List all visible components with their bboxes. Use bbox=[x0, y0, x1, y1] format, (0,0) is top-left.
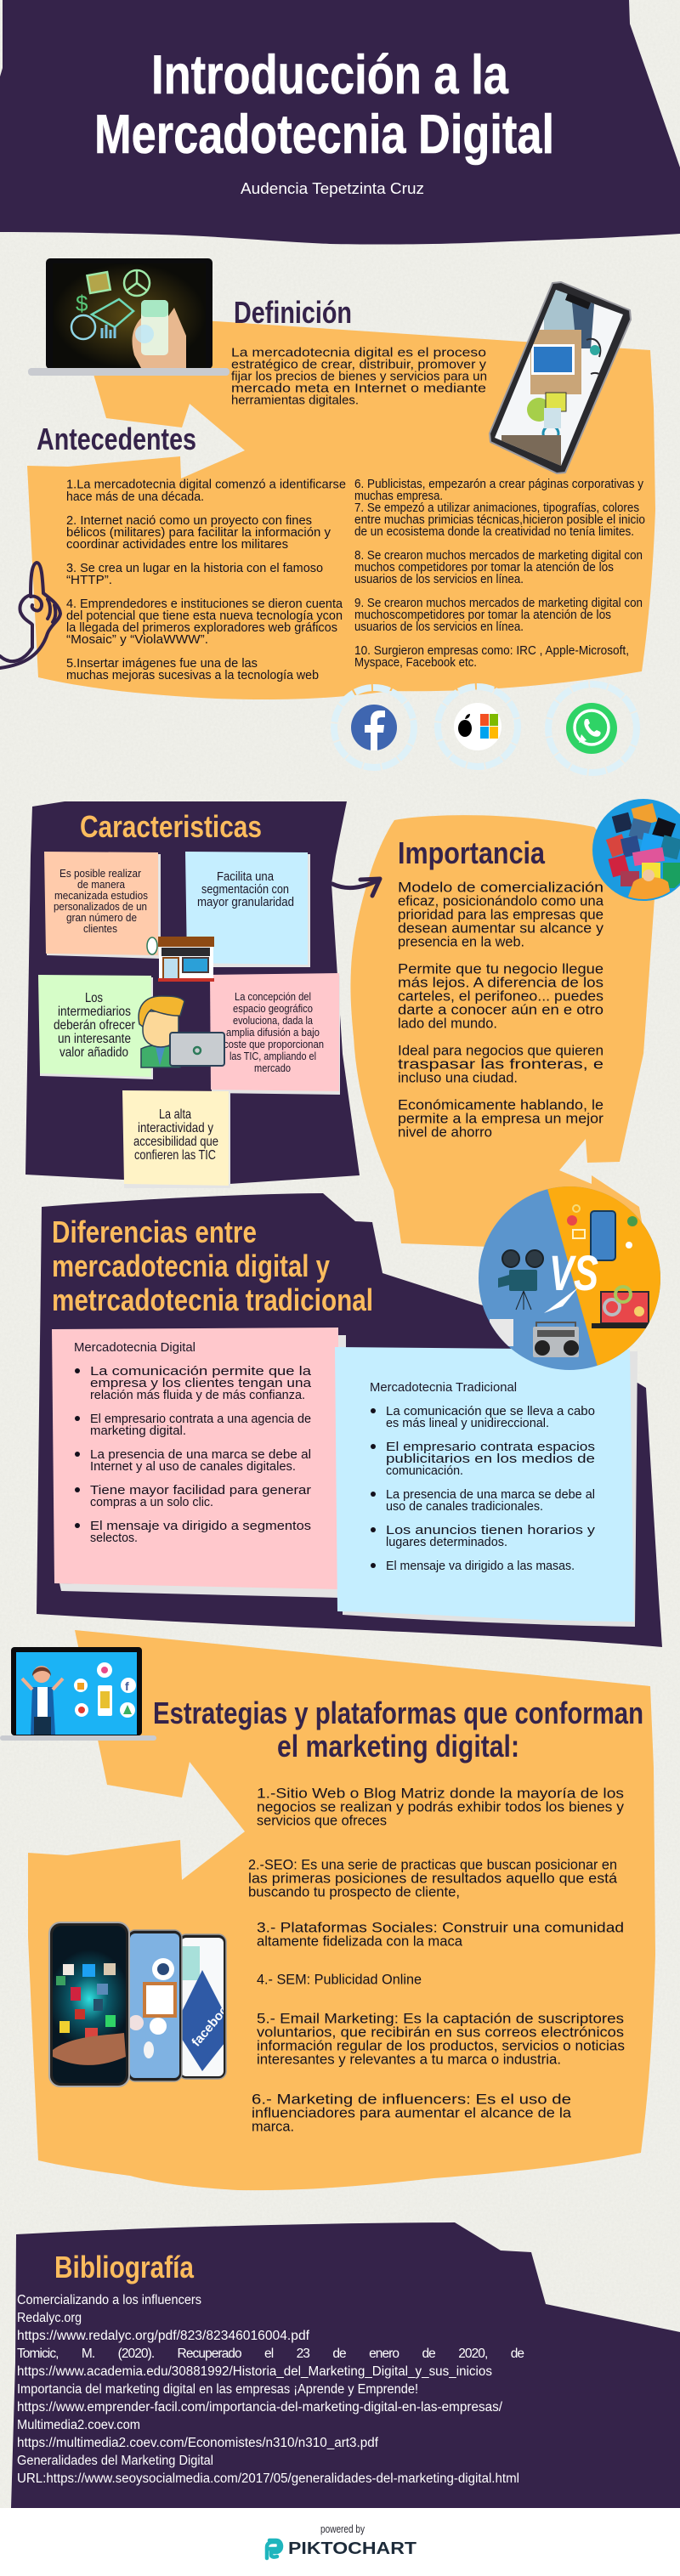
heading: diferencias: Diferencias entre bbox=[52, 1214, 257, 1249]
VS lettering: VS bbox=[549, 1246, 598, 1301]
panel: mercadotecnia tradicional blue note: La presencia de una marca se debe al bbox=[386, 1487, 595, 1502]
text: estrategias list: interesantes y relevantes a tu marca o industria. bbox=[257, 2052, 561, 2067]
text: antecedentes left column: “Mosaic” y “ViolaWWW”. bbox=[66, 632, 208, 647]
text: estrategias list: buscando tu prospecto de cliente, bbox=[248, 1883, 460, 1900]
text: importancia: más lejos. A diferencia de los bbox=[398, 974, 604, 991]
panel: mercadotecnia digital pink note: Tiene mayor facilidad para generar bbox=[90, 1483, 311, 1497]
note: peach: mecanizada estudios bbox=[54, 889, 148, 902]
text: estrategias list: marca. bbox=[252, 2118, 294, 2135]
text: estrategias list: 5.- Email Marketing: Es la captación de suscriptores bbox=[257, 2011, 624, 2026]
panel: diferencias dark bbox=[37, 1193, 662, 1647]
text: antecedentes left column: coordinar actividades entre los militares bbox=[66, 537, 288, 552]
panel: mercadotecnia digital pink note: marketing digital. bbox=[90, 1424, 186, 1438]
heading: Definición: Definición bbox=[234, 295, 352, 330]
text: antecedentes right column: usuarios de los servicios en línea. bbox=[354, 572, 524, 586]
panel: mercadotecnia tradicional blue note: La comunicación que se lleva a cabo bbox=[386, 1404, 595, 1418]
panel: mercadotecnia digital pink note: La presencia de una marca se debe al bbox=[90, 1447, 311, 1462]
references: Importancia del marketing digital en las empresas ¡Aprende y Emprende! bbox=[17, 2382, 418, 2397]
references: Redalyc.org bbox=[17, 2311, 82, 2325]
text: antecedentes left column: hace más de una década. bbox=[66, 490, 204, 504]
panel: mercadotecnia tradicional blue note: comunicación. bbox=[386, 1464, 463, 1478]
laptop base bbox=[0, 1735, 156, 1741]
header banner bbox=[0, 0, 680, 245]
icon: laptop with neon marketing icons bbox=[28, 258, 230, 376]
text: antecedentes right column: usuarios de los servicios en línea. bbox=[354, 620, 524, 634]
panel: mercadotecnia tradicional blue note bbox=[335, 1347, 638, 1627]
note: blue bbox=[185, 852, 310, 967]
references: Generalidades del Marketing Digital bbox=[17, 2454, 213, 2468]
note: green: valor añadido bbox=[60, 1045, 128, 1060]
text: antecedentes right column: muchoscompetidores por tomar la atención de los bbox=[354, 608, 611, 622]
note: blue: mayor granularidad bbox=[197, 895, 294, 909]
panel: mercadotecnia digital pink note: Mercadotecnia Digital bbox=[74, 1340, 196, 1355]
note: peach: gran número de bbox=[66, 911, 137, 924]
text: estrategias list: información regular de los productos, servicios o noticias bbox=[257, 2038, 625, 2053]
text: importancia: eficaz, posicionándolo como una bbox=[398, 892, 604, 909]
movie camera bbox=[498, 1250, 543, 1310]
references: Comercializando a los influencers bbox=[17, 2293, 201, 2307]
note: yellow: accesibilidad que bbox=[133, 1135, 218, 1149]
note: pink bbox=[210, 973, 340, 1095]
panel: mercadotecnia digital pink note: empresa y los clientes tengan una bbox=[90, 1376, 312, 1390]
footer: powered by bbox=[320, 2523, 366, 2535]
heading: Caracteristicas: Caracteristicas bbox=[80, 809, 262, 844]
text: importancia: Económicamente hablando, le bbox=[398, 1096, 604, 1113]
panel: mercadotecnia tradicional blue note: El empresario contrata espacios bbox=[386, 1440, 595, 1454]
panel: caracteristicas dark bbox=[26, 801, 360, 1188]
text: estrategias list: 3.- Plataformas Sociales: Construir una comunidad bbox=[257, 1919, 624, 1936]
panel: mercadotecnia tradicional blue note: El mensaje va dirigido a las masas. bbox=[386, 1559, 575, 1573]
text: importancia: incluso una ciudad. bbox=[398, 1069, 518, 1086]
text: antecedentes right column: 8. Se crearon muchos mercados de marketing digital con bbox=[354, 548, 643, 563]
icon: laptop with neon marketing icons: $ bbox=[76, 291, 88, 316]
note: blue: segmentación con bbox=[201, 882, 289, 897]
icon: facebook bbox=[334, 688, 414, 767]
text: importancia: prioridad para las empresas que bbox=[398, 906, 604, 923]
panel: mercadotecnia digital pink note: El empresario contrata a una agencia de bbox=[90, 1412, 311, 1426]
panel: mercadotecnia tradicional blue note: publicitarios en los medios de bbox=[386, 1452, 595, 1466]
text: antecedentes left column: 1.La mercadotecnia digital comenzó a identificarse bbox=[66, 478, 346, 491]
text: definition: fijar los precios de bienes y servicios para un bbox=[231, 369, 487, 384]
text: antecedentes left column: muchas mejoras sucesivas a la tecnología web bbox=[66, 668, 319, 682]
text: antecedentes left column: bélicos (militares) para facilitar la información y bbox=[66, 525, 331, 540]
note: green bbox=[38, 975, 153, 1079]
note: peach: personalizados de un bbox=[54, 900, 147, 913]
text: antecedentes left column: 2. Internet nació como un proyecto con fines bbox=[66, 513, 312, 528]
bullets bbox=[371, 1408, 376, 1568]
icon: three smartphones bbox=[48, 1922, 236, 2086]
note: green: deberán ofrecer bbox=[54, 1018, 136, 1033]
phone one bbox=[48, 1922, 130, 2086]
panel: mercadotecnia tradicional blue note: lugares determinados. bbox=[386, 1535, 507, 1549]
text: importancia: presencia en la web. bbox=[398, 933, 524, 950]
laptop base bbox=[28, 368, 230, 376]
note: peach: de manera bbox=[77, 878, 126, 891]
note: pink: coste que proporcionan bbox=[224, 1038, 324, 1050]
phone three bbox=[182, 1933, 227, 2080]
references: https://multimedia2.coev.com/Economistes/n310/n310_art3.pdf bbox=[17, 2436, 379, 2450]
panel: estrategias orange arrow shape bbox=[28, 1630, 655, 2190]
note: green: intermediarios bbox=[58, 1005, 131, 1019]
references: https://www.academia.edu/30881992/Historia_del_Marketing_Digital_y_sus_inicios bbox=[17, 2364, 492, 2379]
references bbox=[17, 2293, 524, 2486]
text: antecedentes left column: del potencial que tiene esta nueva tecnología ycon bbox=[66, 609, 343, 623]
text: definition bbox=[231, 345, 487, 408]
text: antecedentes left column: 5.Insertar imágenes fue una de las bbox=[66, 656, 258, 671]
panel: mercadotecnia digital pink note bbox=[52, 1328, 346, 1598]
text: antecedentes left column: la llegada del primeros exploradores web gráficos bbox=[66, 620, 337, 635]
text: antecedentes left column: “HTTP”. bbox=[66, 573, 112, 587]
text: importancia: Permite que tu negocio llegue bbox=[398, 960, 604, 977]
heading: diferencias: mercadotecnia digital y bbox=[52, 1248, 330, 1283]
heading: Importancia: Importancia bbox=[398, 835, 546, 870]
note: pink: amplia difusión a bajo bbox=[226, 1026, 320, 1039]
note: pink: espacio geográfico bbox=[233, 1002, 313, 1015]
panel: bibliografia bbox=[11, 2222, 680, 2508]
panel: mercadotecnia digital pink note: relación más fluida y de más confianza. bbox=[90, 1388, 305, 1402]
text: definition: La mercadotecnia digital es el proceso bbox=[231, 345, 486, 360]
note: peach: Es posible realizar bbox=[60, 867, 142, 880]
note: pink: La concepción del bbox=[235, 990, 311, 1003]
text: definition: estratégico de crear, distribuir, promover y bbox=[231, 357, 487, 372]
heading: estrategias bbox=[153, 1696, 643, 1764]
text: antecedentes left column: 4. Emprendedores e instituciones se dieron cuenta bbox=[66, 597, 343, 611]
boombox bbox=[533, 1322, 579, 1357]
text: estrategias list: 6.- Marketing de influencers: Es el uso de bbox=[252, 2091, 571, 2108]
icon: laptop with social icons bbox=[0, 1647, 156, 1741]
icon: person with laptop bbox=[139, 996, 224, 1067]
references: Multimedia2.coev.com bbox=[17, 2418, 140, 2432]
text: importancia: traspasar las fronteras, e bbox=[398, 1056, 604, 1073]
text: antecedentes right column: de un ecosistema donde la creatividad no tenía limites. bbox=[354, 524, 634, 539]
text: estrategias list: 1.-Sitio Web o Blog Matriz donde la mayoría de los bbox=[257, 1785, 624, 1802]
text: importancia: nivel de ahorro bbox=[398, 1124, 492, 1141]
note: yellow bbox=[122, 1090, 230, 1188]
note: yellow: interactividad y bbox=[138, 1121, 213, 1135]
footer bbox=[0, 2508, 680, 2576]
panel: mercadotecnia digital pink note: compras a un solo clic. bbox=[90, 1495, 213, 1509]
icon: pointing hand bbox=[0, 563, 60, 668]
note: pink: mercado bbox=[254, 1062, 291, 1074]
icon: social media circle bbox=[592, 799, 680, 901]
text: antecedentes right column bbox=[354, 477, 645, 670]
note: yellow: confieren las TIC bbox=[134, 1148, 216, 1163]
note: green: Los bbox=[85, 991, 103, 1005]
text: antecedentes right column: muchos competidores por tomar la atención de los bbox=[354, 560, 614, 575]
text: importancia: darte a conocer aún en e otro bbox=[398, 1001, 604, 1018]
icon: store bbox=[147, 937, 214, 982]
arrow bbox=[332, 879, 380, 896]
note: green: un interesante bbox=[58, 1032, 131, 1046]
text: estrategias list: negocios se realizan y podrás exhibir todos los bienes y bbox=[257, 1798, 624, 1815]
icon: tilted smartphone bbox=[489, 281, 632, 474]
author: Audencia Tepetzinta Cruz bbox=[241, 180, 424, 197]
panel: definition and background orange arrow shape bbox=[27, 312, 655, 699]
text: importancia: lado del mundo. bbox=[398, 1015, 497, 1032]
panel: mercadotecnia tradicional blue note: uso de canales tradicionales. bbox=[386, 1499, 543, 1514]
text: antecedentes right column: 6. Publicistas, empezarón a crear páginas corporativas y bbox=[354, 477, 643, 491]
references: URL:https://www.seoysocialmedia.com/2017/05/generalidades-del-marketing-digital.html bbox=[17, 2471, 519, 2486]
text: definition: mercado meta en Internet o mediante bbox=[231, 381, 486, 396]
text: antecedentes right column: 9. Se crearon muchos mercados de marketing digital con bbox=[354, 596, 643, 610]
panel: mercadotecnia digital pink note: El mensaje va dirigido a segmentos bbox=[90, 1519, 311, 1533]
references: https://www.emprender-facil.com/importancia-del-marketing-digital-en-las-empresas/ bbox=[17, 2400, 503, 2415]
heading: diferencias bbox=[52, 1214, 373, 1317]
note: yellow: La alta bbox=[159, 1107, 191, 1122]
text: antecedentes right column: muchas empresa. bbox=[354, 489, 443, 503]
text: estrategias list: 2.-SEO: Es una serie de practicas que buscan posicionar en bbox=[248, 1856, 617, 1873]
title: Mercadotecnia Digital bbox=[94, 103, 554, 165]
text: definition: herramientas digitales. bbox=[231, 393, 359, 408]
title: Introducción a la bbox=[151, 43, 509, 105]
icon: VS circle bbox=[479, 1186, 672, 1373]
heading: estrategias: el marketing digital: bbox=[277, 1729, 519, 1764]
note: pink: las TIC, ampliando el bbox=[230, 1050, 316, 1062]
text: importancia: permite a la empresa un mejor bbox=[398, 1110, 604, 1127]
text: antecedentes left column bbox=[66, 478, 346, 682]
note: peach bbox=[44, 852, 161, 959]
text: importancia: desean aumentar su alcance y bbox=[398, 920, 604, 937]
text: importancia bbox=[398, 879, 604, 1141]
woman bbox=[22, 1666, 63, 1735]
text: estrategias list: altamente fidelizada con la maca bbox=[257, 1933, 463, 1950]
text: importancia: Ideal para negocios que quieren bbox=[398, 1042, 604, 1059]
phone two bbox=[128, 1930, 182, 2081]
text: importancia: carteles, el perifoneo... puedes bbox=[398, 988, 604, 1005]
icon: laptop with social icons: f bbox=[125, 1679, 129, 1693]
title bbox=[94, 43, 554, 165]
note: blue: Facilita una bbox=[217, 869, 275, 884]
VS lettering bbox=[544, 1246, 598, 1313]
icon: whatsapp bbox=[548, 684, 637, 773]
panel: mercadotecnia digital pink note: selectos. bbox=[90, 1531, 138, 1545]
panel: mercadotecnia tradicional blue note: es más lineal y unidireccional. bbox=[386, 1416, 549, 1430]
note: peach: clientes bbox=[83, 922, 117, 935]
panel: importancia orange shape bbox=[350, 815, 654, 1247]
text: estrategias list: 4.- SEM: Publicidad Online bbox=[257, 1972, 422, 1987]
text: antecedentes right column: entre muchas primicias técnicas,hicieron posible el inicio bbox=[354, 512, 645, 527]
text: antecedentes left column: 3. Se crea un lugar en la historia con el famoso bbox=[66, 561, 323, 575]
heading: Antecedentes: Antecedentes bbox=[37, 422, 196, 456]
icon: piktochart logo bbox=[267, 2540, 281, 2558]
smartphone bbox=[591, 1211, 615, 1260]
text: estrategias list: las primeras posiciones de resultados aquello que está bbox=[248, 1870, 618, 1887]
references: Tomicic, M. (2020). Recuperado el 23 de enero de 2020, de bbox=[17, 2347, 524, 2361]
footer: PIKTOCHART bbox=[288, 2539, 416, 2558]
text: estrategias list: influenciadores para aumentar el alcance de la bbox=[252, 2104, 572, 2121]
heading: diferencias: metrcadotecnia tradicional bbox=[52, 1282, 373, 1317]
references: https://www.redalyc.org/pdf/823/82346016004.pdf bbox=[17, 2329, 310, 2343]
text: estrategias list bbox=[248, 1785, 625, 2135]
text: antecedentes right column: Myspace, Facebook etc. bbox=[354, 655, 477, 670]
note: pink: evoluciona, dada la bbox=[233, 1014, 314, 1027]
phone three: facebook bbox=[189, 1997, 236, 2049]
red laptop bbox=[592, 1287, 650, 1328]
panel: mercadotecnia digital pink note: La comunicación permite que la bbox=[90, 1364, 312, 1379]
text: antecedentes right column: 10. Surgieron empresas como: IRC , Apple-Microsoft, bbox=[354, 643, 629, 658]
text: estrategias list: servicios que ofreces bbox=[257, 1812, 387, 1829]
text: estrategias list: voluntarios, que recibirán en sus correos electrónicos bbox=[257, 2024, 624, 2040]
panel: mercadotecnia digital pink note: Internet y al uso de canales digitales. bbox=[90, 1459, 296, 1474]
text: antecedentes right column: 7. Se empezó a utilizar animaciones, tipografías, colores bbox=[354, 501, 639, 515]
icon: apple and microsoft bbox=[438, 687, 518, 767]
bullets bbox=[75, 1368, 80, 1528]
panel: mercadotecnia tradicional blue note: Los anuncios tienen horarios y bbox=[386, 1523, 596, 1537]
panel: mercadotecnia tradicional blue note: Mercadotecnia Tradicional bbox=[370, 1380, 517, 1395]
heading: Bibliografía: Bibliografía bbox=[54, 2250, 195, 2284]
text: importancia: Modelo de comercialización bbox=[398, 879, 604, 896]
